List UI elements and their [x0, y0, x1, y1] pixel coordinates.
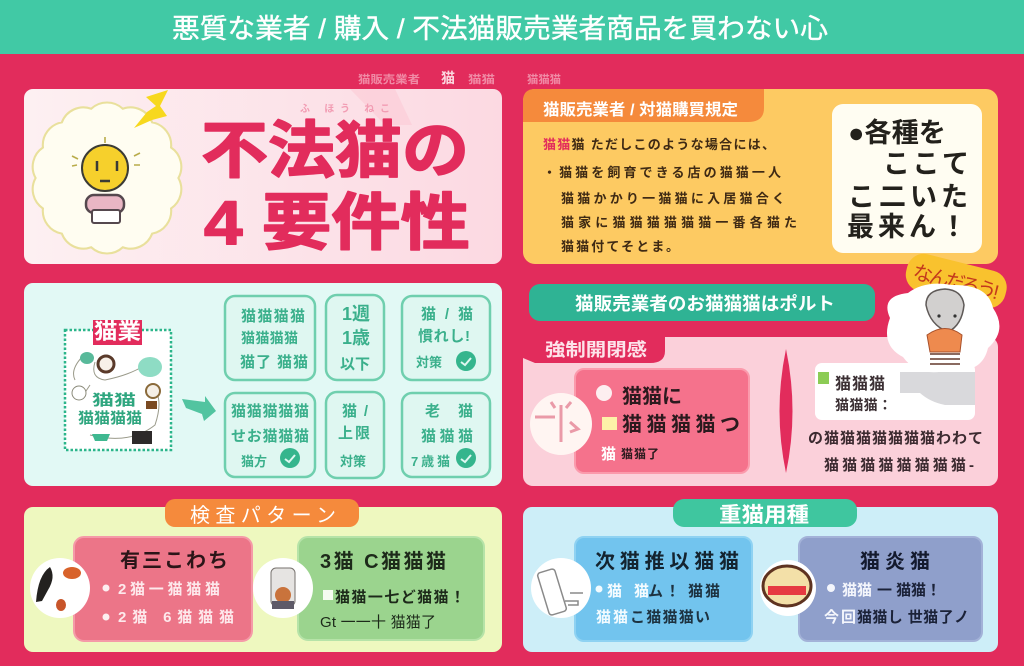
flow diagram card: 猫猫猫猫 [78, 409, 142, 427]
panel: four conditions: 上限 [338, 425, 370, 442]
icon: cat photo circle [30, 558, 90, 618]
card: slate: 猫猫し 世猫了ノ [857, 608, 969, 626]
main heading: 4 要件性 [204, 189, 470, 258]
title: 悪質な業者 / 購入 / 不法猫販売業者商品を買わない心 [172, 14, 828, 44]
tab [673, 499, 857, 527]
panel: four conditions: 猫 / 猫 [421, 305, 473, 323]
callout card: 最来ん！ [847, 212, 967, 242]
card: pink [74, 537, 252, 641]
tab [523, 337, 665, 363]
panel: four conditions: 対策 [340, 454, 366, 469]
card: slate: 今回 [824, 608, 856, 626]
sign: speech label: なんだろう! [910, 262, 1001, 304]
panel: four conditions: せお猫猫猫 [231, 427, 309, 445]
tab: 重猫用種 [719, 504, 809, 527]
panel: four conditions: 猫猫猫猫 [241, 307, 305, 325]
icon: phone circle [531, 558, 591, 618]
card: slate: 猫炎猫 [860, 550, 930, 573]
panel: four conditions [24, 283, 502, 486]
panel: four conditions: 老 猫 [425, 402, 473, 420]
tab [523, 89, 764, 122]
card: slate: 一 猫猫！ [877, 581, 941, 599]
main heading: 不法猫の [201, 117, 469, 186]
card: blue: こ猫猫猫い [630, 608, 710, 626]
panel: main title [24, 89, 502, 264]
panel: four conditions: 猫方 [241, 454, 267, 469]
header banner [0, 0, 1024, 54]
card: pink rule [575, 369, 749, 473]
icon: circle sparkle [530, 393, 592, 455]
card: green: 猫猫一七ど猫猫！ [335, 588, 465, 606]
divider lens [780, 349, 792, 473]
panel: four conditions: 猫猫猫猫猫 [231, 402, 309, 420]
card: green: 3猫 C猫猫猫 [320, 550, 446, 573]
panel: four conditions: 慣れし! [418, 327, 470, 345]
callout card: ここて [883, 149, 969, 179]
tab: 強制開閉感 [545, 339, 647, 360]
small notes above panels: 猫販売業者 [358, 72, 420, 86]
check icons [280, 351, 476, 468]
icon: worried bulb character [33, 90, 181, 254]
card: blue: 次猫推以猫猫 [595, 550, 739, 573]
arrow [182, 396, 216, 421]
flow diagram card [65, 319, 171, 450]
main heading [201, 117, 470, 258]
panel: four conditions: 1週 [342, 304, 370, 324]
card: green: Gt 一一十 猫猫了 [320, 614, 436, 631]
note text: の猫猫猫猫猫猫猫わわて [808, 429, 983, 447]
panel: four conditions: 7歳猫 [411, 454, 450, 469]
section bar: 猫販売業者のお猫猫猫はポルト [575, 293, 835, 314]
body text [543, 137, 797, 254]
card: blue [575, 537, 752, 641]
panel: warning explanation [523, 89, 998, 264]
flow diagram card: 猫業 [94, 319, 141, 344]
card: pink rule: 猫 [601, 445, 616, 463]
panel: four conditions: 猫/ [342, 402, 369, 420]
tab: 検査パターン [190, 504, 336, 527]
condition cards [225, 295, 490, 478]
callout card [832, 104, 982, 253]
panel: inspection patterns [24, 499, 502, 652]
panel: four conditions: 猫了 猫猫 [240, 353, 308, 371]
card: pink rule: 猫猫に [622, 385, 682, 408]
card: pink rule: 猫猫猫猫つ [622, 413, 740, 436]
panel: mandatory opening [523, 337, 998, 486]
card: pink rule: 猫猫了 [621, 446, 659, 461]
panel: four conditions: 猫猫猫 [421, 427, 473, 445]
card: blue: ム！ 猫猫 [648, 582, 720, 600]
body text: 猫猫かかり一猫猫に入居猫合く [561, 191, 785, 206]
callout card: ●各種を [848, 118, 946, 148]
panel: key points [523, 499, 998, 652]
card: blue: 猫猫 [607, 582, 649, 600]
note box [815, 363, 975, 420]
body text: 猫猫付てそとま。 [561, 239, 679, 254]
section bar [529, 284, 875, 321]
card: green [298, 537, 484, 640]
note text: 猫猫猫猫猫猫猫猫- [824, 456, 974, 474]
note box: 猫猫猫 [835, 375, 885, 393]
card: blue: 猫猫 [596, 608, 628, 626]
panel: four conditions: 以下 [340, 356, 370, 373]
tab [165, 499, 359, 527]
note box: 猫猫猫： [835, 397, 892, 413]
body text: ・猫猫を飼育できる店の猫猫一人 [543, 165, 781, 180]
small notes above panels: 猫猫 [468, 72, 495, 86]
icon: food circle [760, 560, 816, 616]
small notes above panels: 猫 [441, 70, 455, 86]
callout card: こ二いた [848, 182, 968, 212]
reading hints: ふ ほう ねこ [300, 103, 390, 115]
icon: thinking character cloud [887, 284, 999, 372]
card: slate [799, 537, 982, 641]
tab: 猫販売業者 / 対猫購買規定 [543, 101, 738, 119]
sign: speech label [902, 250, 1010, 312]
card: pink: 有三こわち [120, 549, 228, 572]
card: pink: 2猫一猫猫猫 [118, 580, 220, 598]
body text: 猫猫猫 ただしこのような場合には、 [543, 137, 775, 152]
small notes above panels [358, 70, 561, 86]
card: slate: 猫猫 [842, 581, 872, 599]
flow diagram card: 猫猫 [92, 391, 136, 409]
panel: four conditions: 猫猫猫猫 [241, 330, 298, 346]
panel: four conditions: 対策 [416, 355, 442, 370]
body text: 猫家に猫猫猫猫猫猫一番各猫た [561, 215, 797, 230]
panel: four conditions: 1歳 [342, 328, 370, 348]
icon: character circle [253, 558, 313, 618]
small notes above panels: 猫猫猫 [527, 72, 561, 86]
card: pink: 2猫 6猫猫猫 [118, 608, 234, 626]
note text [808, 429, 983, 474]
